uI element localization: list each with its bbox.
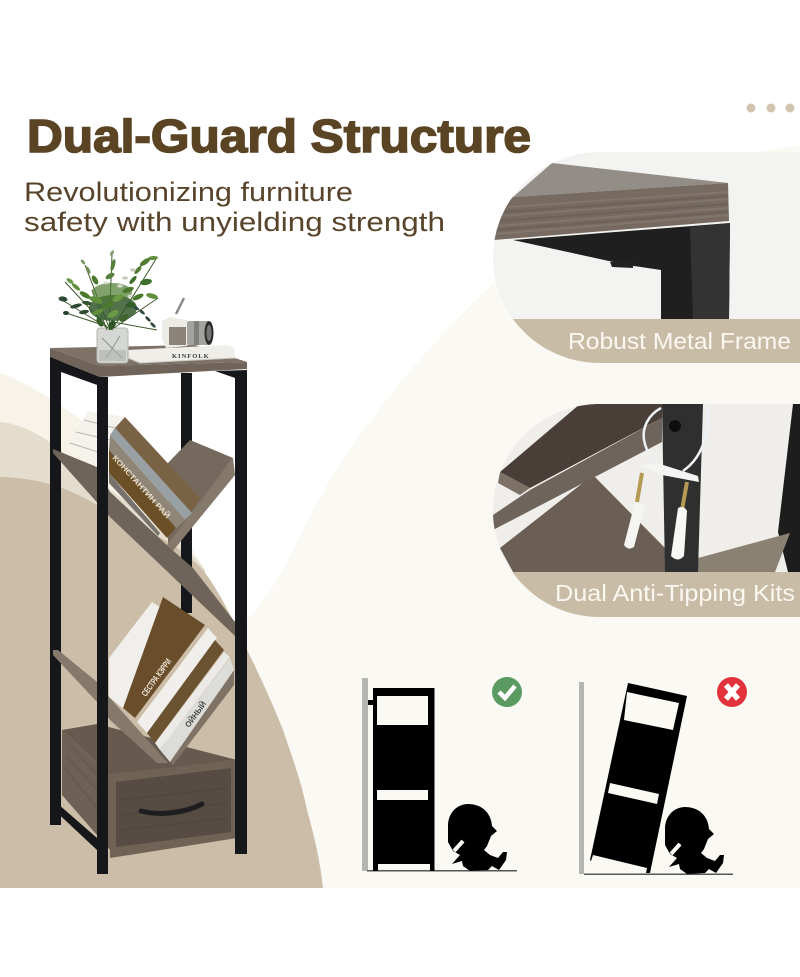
product: shelf unit <box>50 250 247 874</box>
background: cream hill <box>190 145 800 888</box>
subtitle: safety with unyielding strength <box>24 207 445 237</box>
anchor plate <box>663 465 699 482</box>
right post <box>778 404 800 572</box>
background: tan hill <box>0 477 323 888</box>
screw <box>669 420 681 432</box>
book title: KINFOLK <box>172 353 210 360</box>
label band <box>493 319 800 363</box>
bottom left rail <box>50 797 97 850</box>
black unit silhouette <box>373 688 434 871</box>
spine text: СЕСТРА КЭРРИ <box>140 657 173 698</box>
screw right <box>682 482 687 510</box>
plug right <box>671 507 687 560</box>
subtitle <box>24 177 445 237</box>
wire loop <box>644 405 708 471</box>
lower shelf <box>500 475 665 572</box>
label band <box>493 572 800 617</box>
lower books <box>109 597 234 762</box>
screw left <box>637 473 642 502</box>
back right leg <box>181 373 192 613</box>
decorative dots <box>746 104 794 112</box>
tabletop wood <box>494 163 729 240</box>
bottom right shelf <box>698 533 790 572</box>
drawer box <box>62 724 237 858</box>
panel: robust metal frame <box>493 152 800 363</box>
front left leg <box>97 377 108 874</box>
wall <box>579 682 584 874</box>
spine text: КОНСТАНТИН РАЙ <box>111 453 172 520</box>
icon: green check <box>492 677 522 707</box>
subtitle: Revolutionizing furniture <box>24 177 353 207</box>
icon: red cross <box>717 677 747 707</box>
background: mid beige band <box>0 422 205 888</box>
floor <box>584 874 733 875</box>
back left leg <box>50 357 61 825</box>
title: Dual-Guard Structure <box>27 110 531 162</box>
plant <box>58 250 158 331</box>
plug left <box>624 514 640 549</box>
shelf side edge <box>498 472 530 495</box>
small book on top <box>128 345 235 363</box>
shelf front edge <box>493 418 662 530</box>
label: robust metal frame: Robust Metal Frame <box>568 328 791 354</box>
top rails <box>50 357 247 386</box>
diagram: secured unit <box>362 678 517 872</box>
camera <box>162 298 214 348</box>
metal frame corner <box>513 223 730 319</box>
upper shelf interior <box>500 404 662 488</box>
tabletop <box>50 345 247 377</box>
anchor bracket <box>368 700 374 705</box>
upper books <box>109 417 200 538</box>
panel: dual anti-tipping kits <box>493 404 800 617</box>
wall <box>362 678 368 871</box>
front right leg <box>235 372 247 854</box>
upper books pages <box>68 411 125 467</box>
upper v shelf <box>53 440 235 636</box>
child silhouette <box>665 807 724 874</box>
lower books: ОЙНЫЙ <box>183 699 208 729</box>
tilted black unit silhouette <box>590 683 687 873</box>
child silhouette <box>448 804 507 871</box>
background: light beige band <box>0 373 205 888</box>
black post <box>662 404 703 572</box>
drawer handle <box>141 804 202 813</box>
diagram: tipping unit <box>579 682 733 875</box>
lower v shelf <box>53 650 234 765</box>
vase <box>97 328 128 363</box>
label: dual anti-tipping kits: Dual Anti-Tipping Kits <box>555 580 795 606</box>
floor <box>367 870 517 872</box>
